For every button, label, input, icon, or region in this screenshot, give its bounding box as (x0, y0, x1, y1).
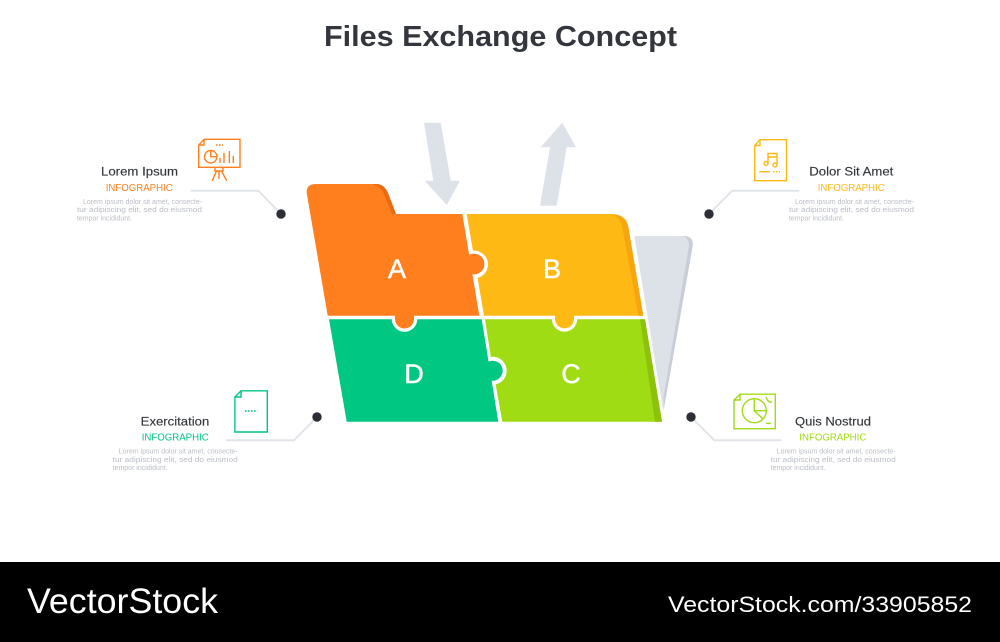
letter D: D (404, 359, 424, 389)
icon: music file (755, 140, 786, 181)
connector D (226, 412, 322, 440)
description (113, 449, 238, 472)
description: Lorem ipsum dolor sit amet, consecte- (119, 449, 238, 456)
folder back sheet (634, 236, 693, 410)
description (77, 199, 203, 222)
heading: Lorem Ipsum (101, 167, 178, 179)
description: tempor incididunt. (113, 465, 168, 472)
puzzle piece B (467, 214, 643, 328)
connector C (686, 412, 782, 440)
puzzle piece C (485, 306, 662, 422)
footer image id: VectorStock.com/33905852 (668, 592, 972, 617)
description: Lorem ipsum dolor sit amet, consecte- (795, 199, 915, 206)
description: tur adipiscing elit, sed do eiusmod (789, 207, 914, 214)
description: tempor incididunt. (789, 215, 844, 222)
connector A (191, 191, 286, 219)
icon: pie chart file (734, 394, 775, 429)
description: Lorem ipsum dolor sit amet, consecte- (777, 449, 896, 456)
arrow: outgoing file (540, 123, 576, 206)
arrow: incoming file (424, 123, 460, 205)
puzzle piece D (329, 306, 507, 422)
description: tempor incididunt. (77, 215, 132, 222)
description (789, 199, 915, 222)
heading: Exercitation (141, 417, 209, 429)
subheading: INFOGRAPHIC (106, 183, 173, 194)
letter A: A (388, 254, 406, 284)
callout C: Quis Nostrud (686, 394, 896, 472)
heading: Quis Nostrud (795, 417, 871, 429)
icon: presentation board (199, 139, 240, 181)
heading: Dolor Sit Amet (809, 167, 894, 179)
description: Lorem ipsum dolor sit amet, consecte- (83, 199, 203, 206)
footer bar (0, 562, 1000, 642)
title: Files Exchange Concept (324, 21, 678, 53)
letter B: B (543, 254, 561, 284)
description (771, 449, 896, 472)
subheading: INFOGRAPHIC (142, 432, 209, 444)
letter C: C (561, 359, 581, 389)
puzzle piece A (307, 184, 488, 328)
callout B: Dolor Sit Amet (704, 140, 915, 222)
description: tempor incididunt. (771, 465, 826, 472)
description: tur adipiscing elit, sed do eiusmod (771, 457, 896, 464)
icon: document (235, 391, 267, 432)
footer logo: VectorStock (27, 582, 219, 621)
puzzle folder (307, 184, 693, 422)
subheading: INFOGRAPHIC (818, 183, 885, 194)
connector B (704, 191, 799, 219)
callout D: Exercitation (113, 391, 322, 472)
callout A: Lorem Ipsum (77, 139, 286, 222)
subheading: INFOGRAPHIC (799, 432, 866, 444)
description: tur adipiscing elit, sed do eiusmod (113, 457, 238, 464)
description: tur adipiscing elit, sed do eiusmod (77, 207, 202, 214)
